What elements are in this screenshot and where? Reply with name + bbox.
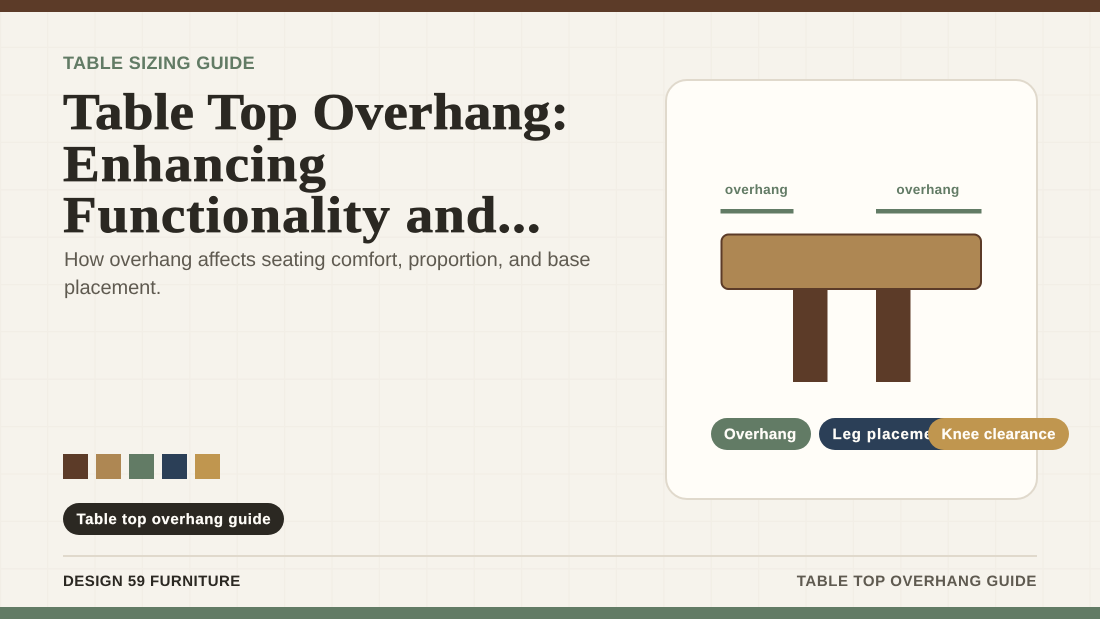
subtitle bbox=[64, 249, 590, 299]
measure bar: right overhang bbox=[876, 209, 982, 214]
diagram: table with overhang bbox=[720, 182, 982, 382]
title: Table Top Overhang: bbox=[63, 84, 569, 141]
panel: table diagram bbox=[665, 79, 1038, 500]
measure bar: left overhang bbox=[720, 209, 794, 214]
subtitle: How overhang affects seating comfort, proportion, and base bbox=[64, 249, 590, 271]
top bar bbox=[0, 0, 1100, 12]
pill: leg placement: Leg placement bbox=[832, 426, 949, 443]
table leg right bbox=[876, 288, 910, 382]
pill: overhang: Overhang bbox=[724, 426, 796, 443]
title: Functionality and... bbox=[63, 187, 542, 244]
footer divider bbox=[63, 555, 1037, 557]
pill: overhang bbox=[711, 418, 811, 450]
bottom bar bbox=[0, 607, 1100, 619]
title bbox=[63, 84, 569, 244]
subtitle: placement. bbox=[64, 277, 161, 299]
colour swatches bbox=[63, 454, 220, 479]
table leg left bbox=[793, 288, 828, 382]
pill: guide label: Table top overhang guide bbox=[76, 511, 271, 528]
eyebrow label: TABLE SIZING GUIDE bbox=[63, 53, 255, 73]
pill: guide label bbox=[63, 503, 284, 535]
pill: knee clearance bbox=[928, 418, 1069, 450]
footer brand: DESIGN 59 FURNITURE bbox=[63, 573, 241, 590]
label: left overhang: overhang bbox=[725, 182, 788, 197]
table top bbox=[722, 234, 981, 289]
pill: leg placement bbox=[819, 418, 960, 450]
title: Enhancing bbox=[63, 136, 327, 193]
pill: knee clearance: Knee clearance bbox=[942, 426, 1056, 443]
footer guide name: TABLE TOP OVERHANG GUIDE bbox=[797, 573, 1037, 590]
label: right overhang: overhang bbox=[896, 182, 960, 197]
